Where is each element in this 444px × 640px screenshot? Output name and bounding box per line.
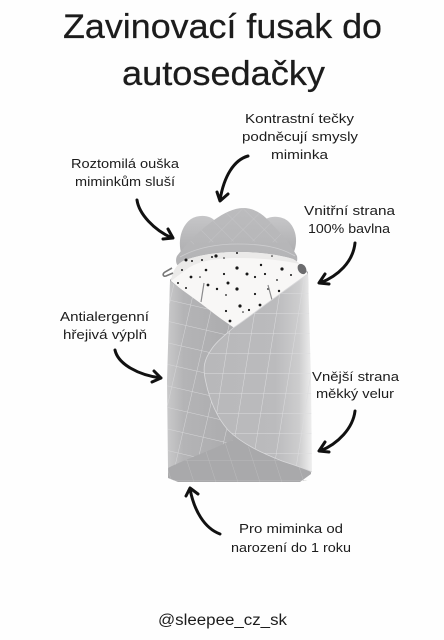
- callout: filling: [60, 309, 149, 342]
- title: autosedačky: [122, 55, 325, 93]
- hood: [176, 208, 297, 266]
- left ear: [180, 216, 216, 256]
- callout: inner side: 100% bavlna: [308, 221, 391, 236]
- callout: outer side: Vnější strana: [312, 369, 400, 384]
- back body: [168, 256, 311, 482]
- callout: inner side: [304, 203, 396, 236]
- arrow: outer side: [319, 411, 355, 452]
- callout: contrasting dots: podněcují smysly: [242, 129, 359, 144]
- right label: [296, 262, 308, 276]
- callout: contrasting dots: miminka: [271, 147, 329, 162]
- right ear: [262, 217, 296, 254]
- arrow: age: [186, 488, 220, 534]
- callout: contrasting dots: [242, 111, 359, 162]
- left flap: [167, 281, 250, 468]
- callout: filling: Antialergenní: [60, 309, 149, 324]
- social handle: @sleepee_cz_sk: [158, 612, 287, 629]
- callout: outer side: [312, 369, 400, 401]
- callout: contrasting dots: Kontrastní tečky: [245, 111, 355, 126]
- callout: age: narození do 1 roku: [231, 540, 351, 555]
- arrow: filling: [115, 350, 161, 382]
- callout: ears: miminkům sluší: [75, 174, 175, 189]
- right flap: [204, 274, 312, 472]
- product illustration: wrap sleeping bag: [163, 208, 312, 482]
- callout: ears: [71, 156, 180, 189]
- arrow: inner side: [319, 243, 355, 284]
- title: [63, 8, 382, 93]
- callout: age: [231, 521, 351, 555]
- callout: filling: hřejivá výplň: [63, 327, 147, 342]
- callout: inner side: Vnitřní strana: [304, 203, 396, 218]
- callout: outer side: měkký velur: [316, 386, 395, 401]
- bottom panel: [168, 440, 312, 482]
- callout: ears: Roztomilá ouška: [71, 156, 180, 171]
- arrow: ears: [137, 200, 173, 239]
- callout: age: Pro miminka od: [239, 521, 343, 536]
- title: Zavinovací fusak do: [63, 8, 382, 46]
- inner cotton lining with dots: [171, 252, 308, 331]
- arrow: contrasting dots: [217, 156, 248, 201]
- left loop tag: [163, 268, 173, 276]
